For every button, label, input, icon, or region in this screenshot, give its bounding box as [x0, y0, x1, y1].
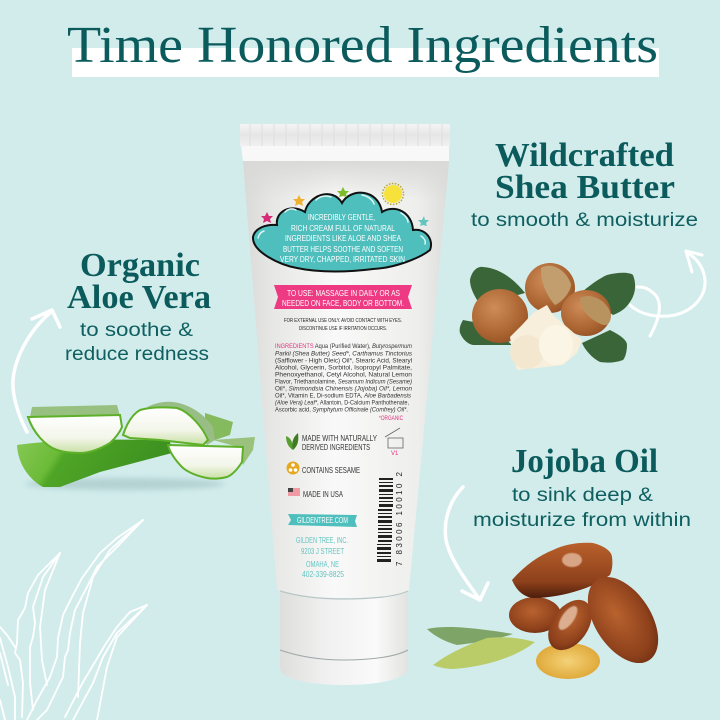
organic note: *ORGANIC: [379, 416, 404, 422]
mascot cloud with text: BUTTER HELPS SOOTHE AND SOFTEN: [283, 244, 403, 254]
stars and sun icons: [261, 184, 429, 226]
to use banner: TO USE: MASSAGE IN DAILY OR AS: [287, 288, 400, 298]
aloe slice left: [28, 405, 122, 453]
illustration: aloe vera pieces: [17, 402, 255, 490]
barcode: 7 83006 10010 2: [395, 471, 404, 566]
shea butter chunk: [510, 305, 582, 370]
ingredients text: Ascorbic acid, Symphytum Officinale (Comfrey) Oil*.: [275, 408, 408, 414]
ingredients text: [275, 344, 413, 414]
date top: [512, 543, 612, 598]
ingredients text: Alcohol, Glycerin, Sorbitol, Isopropyl Palmitate,: [275, 366, 412, 372]
ingredients text: (Aloe Vera) Leaf*, Allantoin, D-Calcium Panthothenate,: [275, 400, 409, 406]
to use banner: NEEDED ON FACE, BODY OR BOTTOM.: [282, 298, 404, 308]
aloe slice right: [168, 437, 255, 479]
shea nut top: [525, 263, 575, 313]
heading: jojoba oil: to sink deep &: [512, 484, 653, 506]
mascot cloud with text: RICH CREAM FULL OF NATURAL: [291, 223, 395, 233]
shea nut right: [561, 290, 611, 336]
heading: shea butter: [471, 137, 698, 231]
title: Time Honored Ingredients: [67, 17, 658, 74]
made in usa text: MADE IN USA: [303, 490, 344, 499]
address: 9203 J STREET: [301, 547, 344, 556]
warning text: DISCONTINUE USE IF IRRITATION OCCURS.: [299, 326, 387, 332]
heading: shea butter: Wildcrafted: [495, 137, 674, 174]
ingredients text: Parkii (Shea Butter) Seed*, Carthamus Tinctorius: [275, 352, 412, 358]
illustration: jojoba dates and leaves: [427, 543, 673, 679]
naturally derived text: MADE WITH NATURALLY: [302, 434, 378, 443]
arrow: shea: [630, 251, 705, 336]
heading: aloe vera: reduce redness: [65, 343, 209, 365]
contains sesame text: CONTAINS SESAME: [302, 466, 360, 475]
mascot cloud with text: INGREDIENTS LIKE ALOE AND SHEA: [285, 233, 401, 243]
heading: jojoba oil: Jojoba Oil: [511, 443, 658, 480]
icon: sesame: [286, 462, 300, 474]
illustration: shea nuts and leaves: [460, 263, 635, 370]
date right: [573, 564, 673, 676]
naturally derived text: [302, 434, 378, 452]
icon: period after opening: [385, 428, 403, 457]
icon: leaf: [286, 433, 298, 450]
arrow: jojoba: [445, 487, 488, 600]
mascot cloud with text: [253, 193, 431, 272]
heading: aloe vera: Aloe Vera: [67, 279, 211, 316]
date lower left: [509, 597, 561, 633]
tube shoulder band: [241, 146, 449, 161]
heading: shea butter: Shea Butter: [495, 169, 675, 206]
aloe back piece: [205, 413, 233, 440]
icon: usa flag: [288, 488, 300, 496]
heading: aloe vera: Organic: [80, 247, 200, 284]
warning text: [284, 318, 402, 332]
address: [296, 536, 348, 579]
jojoba oil pool: [536, 643, 600, 679]
heading: jojoba oil: moisturize from within: [473, 509, 691, 531]
address: GILDEN TREE, INC.: [296, 536, 348, 545]
heading: aloe vera: to soothe &: [80, 319, 193, 341]
ingredients text: INGREDIENTS Aqua (Purified Water), Butyrospermum: [275, 344, 412, 350]
jojoba leaf upper: [427, 627, 513, 645]
arrow: aloe: [13, 310, 60, 432]
ingredients text: (Safflower - High Oleic) Oil*, Stearic Acid, Stearyl: [275, 358, 412, 364]
website banner: [288, 514, 357, 527]
address: OMAHA, NE: [306, 560, 339, 569]
mascot cloud with text: VERY DRY, CHAPPED, IRRITATED SKIN: [280, 254, 405, 264]
shea leaves: [460, 267, 635, 363]
shea nut right patch: [580, 296, 611, 325]
ingredients text: Oil*, Vitamin E, Di-sodium EDTA, Aloe Barbadensis: [275, 394, 411, 400]
shea nut top patch: [541, 266, 571, 305]
aloe shadow: [25, 478, 225, 490]
tube ribbed crimp: [240, 124, 450, 146]
barcode: [377, 471, 404, 566]
date middle: [539, 592, 601, 658]
heading: jojoba oil: [473, 443, 691, 531]
aloe slice middle: [123, 402, 215, 445]
shea nut left: [472, 289, 528, 343]
heading: aloe vera: [65, 247, 211, 365]
mascot cloud with text: INCREDIBLY GENTLE,: [308, 212, 375, 222]
icon: period after opening: V1: [391, 451, 399, 457]
ingredients text: Flavor, Triethanolamine, Sesamum Indicum (Sesame): [275, 380, 412, 386]
ingredients text: Phenoxyethanol, Cetyl Alcohol, Natural Lemon: [275, 372, 412, 378]
product tube: [240, 124, 450, 685]
address: 402-339-8825: [302, 570, 344, 579]
ingredients text: Oil*, Simmondsia Chinensis (Jojoba) Oil*, Lemon: [275, 386, 413, 392]
jojoba leaf lower: [433, 637, 535, 669]
screw cap: [280, 591, 408, 685]
decorative aloe plant outline: [0, 520, 147, 720]
tube body: [241, 146, 449, 598]
heading: shea butter: to smooth & moisturize: [471, 209, 698, 231]
warning text: FOR EXTERNAL USE ONLY. AVOID CONTACT WITH EYES.: [284, 318, 402, 324]
aloe stem: [17, 440, 172, 487]
website banner: GILDENTREE.COM: [297, 516, 348, 525]
naturally derived text: DERIVED INGREDIENTS: [302, 443, 370, 452]
tube upper shading: [243, 161, 449, 200]
to use banner: [274, 285, 412, 309]
